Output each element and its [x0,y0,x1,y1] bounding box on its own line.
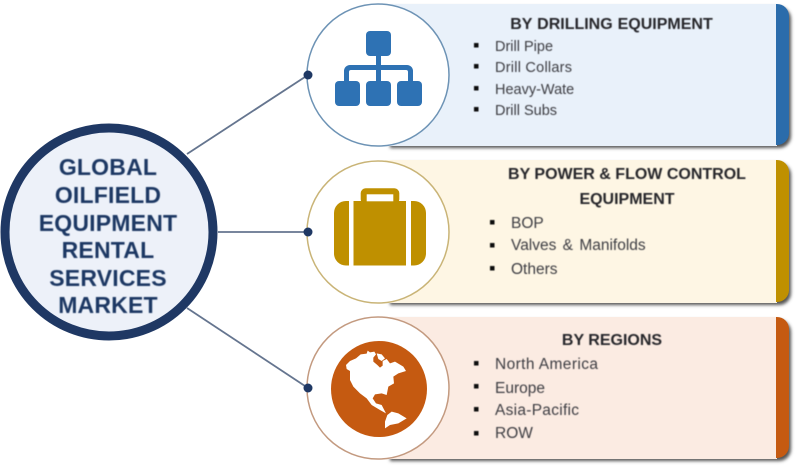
list: drilling items: Drill Collars [495,60,572,76]
list: power items: Valves & Manifolds [511,237,646,254]
list: regions [474,356,598,442]
icon: briefcase [334,188,426,266]
list: drilling items: Drill Pipe [495,39,553,55]
list: regions: Europe [495,380,545,397]
central circle: market title [5,128,213,336]
title: SERVICES [49,265,167,291]
title: GLOBAL [59,154,157,180]
heading: by power and flow control equipment: BY POWER & FLOW CONTROL [508,166,746,183]
panel: by drilling equipment [307,4,791,148]
title: MARKET [58,292,158,318]
connector: middle [218,231,308,233]
panel: by regions [307,317,791,461]
panel: by power and flow control equipment [307,160,791,305]
heading: by regions: BY REGIONS [562,332,662,349]
dot: middle connector [304,228,312,236]
list: power items: BOP [511,215,544,232]
circle: power icon holder [307,161,449,303]
icon: globe [331,341,427,437]
title [39,154,177,318]
list: regions: North America [495,356,598,373]
title: EQUIPMENT [39,210,177,236]
list: drilling items: Drill Subs [495,103,557,119]
list: power items: Others [511,261,558,278]
connector: bottom [187,308,308,388]
dot: top connector [304,70,312,80]
dot: bottom connector [304,384,312,392]
title: RENTAL [62,237,154,263]
list: power items [490,215,646,278]
list: regions: ROW [495,425,533,442]
connector: top [187,75,308,154]
title: OILFIELD [55,182,161,208]
heading: second line: EQUIPMENT [579,191,675,208]
list: regions: Asia-Pacific [495,402,579,419]
icon: hierarchy [335,31,422,106]
circle: drilling icon holder [307,4,449,146]
heading: by drilling equipment: BY DRILLING EQUIPMENT [510,16,713,33]
list: drilling items [474,39,574,119]
list: drilling items: Heavy-Wate [495,82,574,98]
circle: regions icon holder [307,317,449,459]
